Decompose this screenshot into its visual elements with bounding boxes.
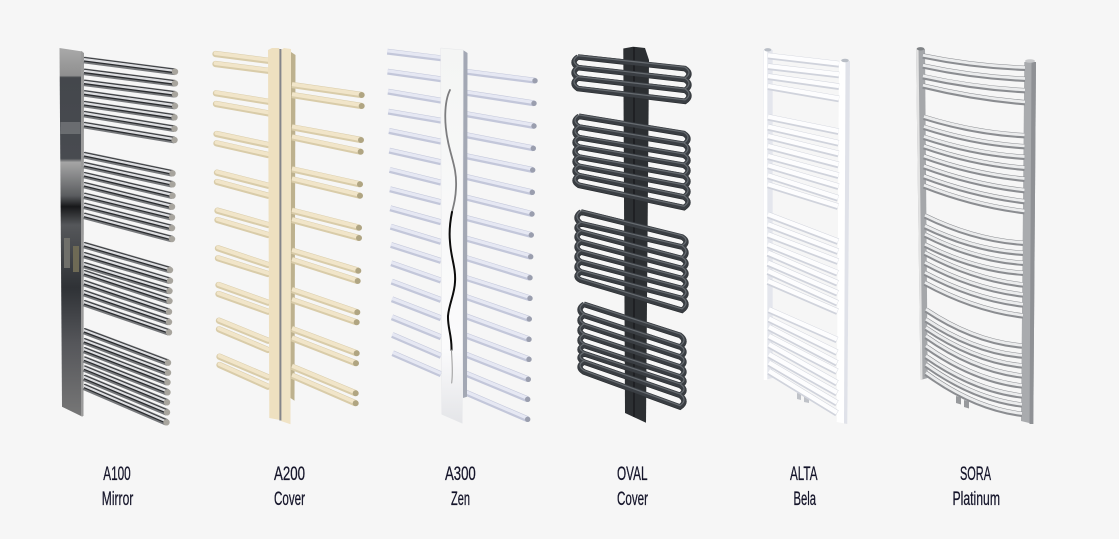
label: ALTA Bela: ALTA [790, 464, 818, 485]
white panel [441, 48, 463, 423]
left rods [216, 53, 268, 387]
label: OVAL Cover: Cover [617, 489, 648, 510]
radiator: A100 Mirror [60, 48, 175, 423]
chrome rods [84, 58, 175, 423]
radiator: A200 Cover [216, 48, 362, 424]
label: A100 Mirror: A100 [103, 464, 131, 485]
radiator: SORA Platinum [916, 47, 1036, 424]
rods [387, 51, 535, 419]
label: SORA Platinum: Platinum [952, 489, 1000, 510]
label: SORA Platinum: SORA [960, 464, 991, 485]
front rods [574, 56, 689, 407]
label: A300 Zen: Zen [451, 489, 470, 510]
label: A100 Mirror [102, 464, 134, 510]
label: A200 Cover: Cover [274, 489, 305, 510]
label: ALTA Bela [790, 464, 818, 510]
radiator: OVAL Cover [574, 47, 689, 423]
posts [916, 47, 1036, 424]
posts [763, 48, 850, 424]
label: A300 Zen: A300 [445, 464, 476, 485]
rod ends [528, 81, 535, 419]
label: OVAL Cover [617, 464, 648, 510]
right rods [292, 84, 362, 403]
label: OVAL Cover: OVAL [617, 464, 648, 485]
centre panel [623, 47, 649, 423]
valves [956, 396, 969, 408]
radiator: A300 Zen [387, 48, 535, 423]
back rods [574, 57, 689, 407]
white bars [768, 55, 839, 413]
radiator: ALTA Bela [763, 48, 850, 424]
rod ends [356, 95, 362, 403]
wave decoration [445, 90, 456, 383]
label: A200 Cover: A200 [274, 464, 305, 485]
mirror panel [60, 48, 84, 417]
label: A200 Cover [274, 464, 305, 510]
valves [797, 393, 809, 403]
label: A100 Mirror: Mirror [102, 489, 134, 510]
rod ends [166, 72, 175, 422]
label: ALTA Bela: Bela [794, 489, 816, 510]
label: SORA Platinum [952, 464, 1000, 510]
panel side [463, 50, 468, 398]
curved bars [923, 55, 1025, 414]
cover panel [268, 48, 296, 424]
label: A300 Zen [445, 464, 476, 510]
